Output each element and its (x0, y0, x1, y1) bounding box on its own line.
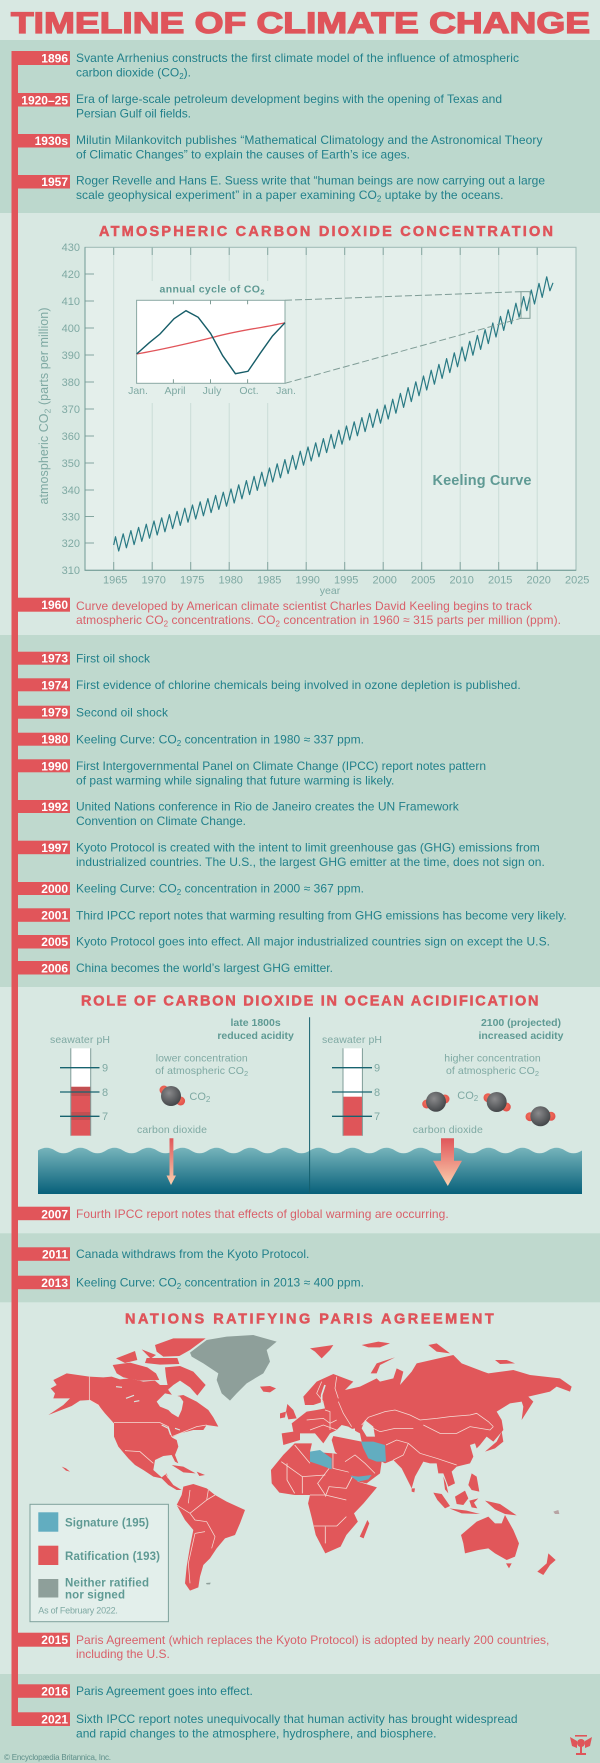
entry 2007: Fourth IPCC report notes that effects of global warming are occurring. (76, 1207, 449, 1221)
y axis labels: 380 (62, 377, 80, 389)
inset: annual cycle of CO2: Jan. (128, 385, 148, 397)
entry 2015: 2015 (41, 1633, 68, 1647)
entry 1979: Second oil shock (76, 705, 169, 719)
inset: annual cycle of CO2: Jan. (276, 385, 296, 397)
entry 1957: 1957 (41, 175, 68, 189)
entry 1997: Kyoto Protocol is created with the intent to limit greenhouse gas (GHG) emissions from (76, 841, 540, 855)
scenario: 2100 projected: 2 (474, 1094, 479, 1103)
inset: annual cycle of CO2: Oct. (239, 385, 259, 397)
entry 1957 (18, 174, 545, 204)
inset: annual cycle of CO2: 2 (260, 288, 264, 297)
entry 1920–25: 1920–25 (21, 94, 68, 108)
panel: nations ratifying Paris Agreement (18, 1312, 572, 1661)
entry 1930s: 1930s (35, 134, 68, 148)
scenario: late 1800s: CO (189, 1091, 206, 1103)
entry 2011: Canada withdraws from the Kyoto Protocol. (76, 1247, 309, 1261)
entry 2013: Keeling Curve: CO (76, 1276, 177, 1290)
inset: annual cycle of CO2: July (203, 385, 222, 397)
entry 2016: Paris Agreement goes into effect. (76, 1684, 253, 1698)
entry 2013 (18, 1276, 364, 1291)
heading: NATIONS RATIFYING PARIS AGREEMENT (125, 1312, 494, 1328)
North America (48, 1335, 277, 1490)
entry 1960: 2 (275, 620, 280, 628)
y axis labels: 370 (62, 404, 80, 416)
pH gauge right: 7 (374, 1111, 380, 1123)
entry 2021 (12, 1712, 518, 1740)
entry 2016: 2016 (41, 1684, 68, 1698)
entry 2000: 2 (177, 888, 182, 897)
scenario: 2100 projected: seawater pH (322, 1034, 382, 1046)
y axis labels: 320 (62, 538, 80, 550)
entry 2001: Third IPCC report notes that warming resulting from GHG emissions has become very likely. (76, 908, 567, 922)
legend item: neither: Neither ratified (65, 1578, 149, 1590)
entry 1960: concentration in 1960 ≈ 315 parts per million (ppm). (280, 613, 561, 627)
entry 1997: industrialized countries. The U.S., the largest GHG emitter at the time, does not sign on. (76, 855, 545, 869)
y axis title: 2 (42, 408, 52, 413)
entry 1920–25 (18, 92, 502, 120)
title: TIMELINE OF CLIMATE CHANGE (11, 7, 590, 40)
entry 1979 (18, 705, 169, 720)
entry 1960: 2 (164, 620, 169, 628)
scenario: 2100 projected: CO (457, 1090, 474, 1102)
scenario: 2100 projected: 2 (535, 1069, 539, 1078)
inset: annual cycle of CO2 (128, 284, 296, 397)
icon: Britannica thistle (570, 1735, 592, 1755)
pH gauge left (60, 1048, 108, 1136)
entry 1979: 1979 (41, 706, 68, 720)
entry 2015: including the U.S. (76, 1647, 170, 1661)
x axis labels (103, 574, 589, 586)
scenario: 2100 projected: of atmospheric CO (446, 1065, 535, 1077)
entry 1990: 1990 (41, 759, 68, 773)
entry 2000 (18, 882, 364, 897)
x axis labels: 1970 (141, 574, 166, 586)
x axis labels: 1985 (257, 574, 281, 586)
scenario: 2100 projected: increased acidity (478, 1030, 564, 1042)
y axis labels: 400 (62, 323, 80, 335)
Greenland (190, 1335, 277, 1401)
entry 1920–25: Persian Gulf oil fields. (76, 106, 191, 120)
y axis title: (parts per million) (37, 308, 51, 409)
y axis labels: 410 (62, 296, 80, 308)
panel: timeline 2016–2021 (0, 1674, 600, 1763)
scenario: late 1800s: late 1800s (230, 1017, 281, 1029)
arrow: small CO2 uptake (166, 1138, 176, 1185)
CO2 molecules (422, 1092, 556, 1126)
legend note: As of February 2022. (38, 1606, 118, 1616)
divider (309, 1017, 311, 1193)
y axis labels: 340 (62, 485, 80, 497)
ocean with waves (38, 1148, 582, 1194)
pH gauge left: 8 (102, 1087, 108, 1099)
scenario: late 1800s: lower concentration (156, 1052, 248, 1064)
entry 1896: 2 (179, 72, 184, 81)
timeline bar (12, 51, 18, 1726)
x axis title: year (320, 585, 341, 597)
y axis labels: 310 (62, 565, 80, 577)
scenario: 2100 projected: carbon dioxide (413, 1124, 483, 1136)
pH gauge right: 8 (374, 1087, 380, 1099)
entry 1992: 1992 (41, 800, 68, 814)
CO2 molecule (160, 1086, 185, 1106)
entry 1980: 2 (177, 739, 182, 748)
entry 1957: scale geophysical experiment” in a paper examining CO (76, 188, 377, 202)
entry 1973: 1973 (41, 652, 68, 666)
entry 1997: 1997 (41, 841, 68, 855)
signature-only countries (361, 1442, 386, 1462)
legend item: neither (38, 1578, 149, 1602)
scenario: late 1800s: 2 (206, 1095, 211, 1104)
entry 1973 (18, 651, 151, 666)
Eurasia (280, 1342, 572, 1493)
y axis labels: 390 (62, 350, 80, 362)
panel: timeline 2011–2013 (0, 1233, 600, 1302)
y axis labels: 330 (62, 512, 80, 524)
entry 2013: 2 (177, 1282, 182, 1291)
x axis labels: 1980 (218, 574, 243, 586)
entry 1896: Svante Arrhenius constructs the first climate model of the influence of atmospheric (76, 51, 519, 65)
entry 2021: and rapid changes to the atmosphere, hydrosphere, and biosphere. (76, 1726, 436, 1740)
entry 2006: China becomes the world’s largest GHG emitter. (76, 961, 333, 975)
pH gauge left: 7 (102, 1111, 108, 1123)
entry 1930s: of Climatic Changes” to explain the causes of Earth’s ice ages. (76, 148, 410, 162)
scenario: late 1800s: of atmospheric CO (155, 1065, 244, 1077)
scenario: late 1800s (50, 1017, 294, 1185)
legend (30, 1504, 168, 1622)
entry 1896 (12, 51, 519, 81)
entry 1980: concentration in 1980 ≈ 337 ppm. (181, 732, 364, 746)
entry 1960: 1960 (41, 598, 68, 612)
entry 1960: Curve developed by American climate scientist Charles David Keeling begins to track (76, 599, 533, 613)
entry 2005: Kyoto Protocol goes into effect. All major industrialized countries sign on except the U.S. (76, 935, 550, 949)
entry 2000: Keeling Curve: CO (76, 882, 177, 896)
legend item: neither: nor signed (65, 1590, 125, 1602)
entry 1957: Roger Revelle and Hans E. Suess write that “human beings are now carrying out a large (76, 174, 545, 188)
arrow: large CO2 uptake (433, 1138, 462, 1186)
x axis labels: 2025 (565, 574, 589, 586)
entry 2011: 2011 (42, 1248, 68, 1262)
x axis labels: 1965 (103, 574, 127, 586)
data line (114, 277, 553, 551)
entry 1930s: Milutin Milankovitch publishes “Mathematical Climatology and the Astronomical Theory (76, 133, 542, 147)
x axis labels: 2010 (449, 574, 474, 586)
y axis labels: 360 (62, 431, 80, 443)
scenario: 2100 projected: 2100 (projected) (481, 1017, 561, 1029)
credit: © Encyclopædia Britannica, Inc. (4, 1753, 111, 1762)
entry 2021: 2021 (41, 1712, 68, 1726)
entry 1930s (18, 133, 542, 162)
panel: early timeline 1896–1957 (0, 40, 600, 213)
scenario: 2100 projected: higher concentration (444, 1052, 541, 1064)
entry 1990: of past warming while signaling that future warming is likely. (76, 773, 394, 787)
entry 1957: uptake by the oceans. (381, 188, 504, 202)
entry 1990 (18, 759, 486, 787)
heading: ROLE OF CARBON DIOXIDE IN OCEAN ACIDIFICATION (81, 994, 538, 1010)
legend item: ratification: Ratification (193) (65, 1551, 160, 1563)
entry 2000: concentration in 2000 ≈ 367 ppm. (181, 882, 364, 896)
y axis title: atmospheric CO (37, 413, 51, 504)
entry 1974: First evidence of chlorine chemicals being involved in ozone depletion is published. (76, 678, 521, 692)
entry 1990: First Intergovernmental Panel on Climate Change (IPCC) report notes pattern (76, 759, 486, 773)
entry 1896: ). (184, 66, 191, 80)
curve label: Keeling Curve (432, 473, 532, 489)
y axis labels (62, 242, 80, 577)
x axis labels: 2000 (372, 574, 397, 586)
y axis labels: 350 (62, 458, 80, 470)
pH gauge right: 9 (374, 1062, 380, 1074)
x axis labels: 2005 (411, 574, 435, 586)
entry 2013: concentration in 2013 ≈ 400 ppm. (181, 1276, 364, 1290)
line chart: Keeling Curve (37, 242, 589, 597)
scenario: 2100 projected (322, 1017, 564, 1186)
panel: timeline 1973–2006 (0, 635, 600, 987)
heading: ATMOSPHERIC CARBON DIOXIDE CONCENTRATION (99, 224, 553, 240)
entry 1957: 2 (377, 194, 382, 204)
x axis labels: 1975 (180, 574, 204, 586)
pH gauge right (332, 1048, 380, 1136)
entry 2013: 2013 (41, 1276, 68, 1290)
entry 2005: 2005 (41, 935, 68, 949)
inset: annual cycle of CO2: April (164, 385, 186, 397)
zoom callout lines (285, 292, 530, 383)
entry 1992: United Nations conference in Rio de Janeiro creates the UN Framework (76, 800, 460, 814)
entry 1980: Keeling Curve: CO (76, 732, 177, 746)
scenario: late 1800s: reduced acidity (217, 1030, 294, 1042)
scenario: late 1800s: seawater pH (50, 1034, 110, 1046)
entry 2000: 2000 (41, 882, 68, 896)
x axis labels: 1990 (295, 574, 320, 586)
entry 2021: Sixth IPCC report notes unequivocally that human activity has brought widespread (76, 1712, 518, 1726)
entry 1980 (18, 732, 364, 748)
y axis labels: 420 (62, 269, 80, 281)
x axis labels: 2015 (488, 574, 512, 586)
South America (177, 1484, 245, 1591)
entry 2015 (18, 1633, 549, 1661)
Iceland (260, 1386, 276, 1392)
entry 1960 (18, 598, 561, 628)
scenario: late 1800s: carbon dioxide (137, 1124, 207, 1136)
entry 1980: 1980 (41, 733, 68, 747)
entry 1960: atmospheric CO (76, 613, 164, 627)
inset: annual cycle of CO2: annual cycle of CO (160, 284, 260, 296)
world map (48, 1335, 572, 1591)
entry 1992: Convention on Climate Change. (76, 814, 246, 828)
Africa (271, 1443, 377, 1553)
entry 1973: First oil shock (76, 651, 151, 665)
entry 1920–25: Era of large-scale petroleum development begins with the opening of Texas and (76, 92, 502, 106)
panel: atmospheric carbon dioxide concentration (18, 224, 589, 628)
entry 2001: 2001 (41, 909, 68, 923)
entry 2007: 2007 (41, 1207, 68, 1221)
x axis labels: 2020 (526, 574, 551, 586)
pH gauge left: 9 (102, 1062, 108, 1074)
entry 1960: concentrations. CO (168, 613, 275, 627)
entry 2006: 2006 (41, 962, 68, 976)
scenario: late 1800s: 2 (244, 1069, 248, 1078)
y axis labels: 430 (62, 242, 80, 254)
x axis labels: 1995 (334, 574, 358, 586)
Oceania (433, 1491, 559, 1575)
entry 1896: 1896 (41, 52, 68, 66)
entry 1992 (18, 800, 460, 828)
entry 2015: Paris Agreement (which replaces the Kyoto Protocol) is adopted by nearly 200 countries, (76, 1633, 549, 1647)
entry 1974: 1974 (41, 678, 68, 692)
entry 1997 (18, 841, 545, 869)
entry 1896: carbon dioxide (CO (76, 66, 179, 80)
panel: role of carbon dioxide in ocean acidification (18, 994, 582, 1221)
legend item: signature: Signature (195) (65, 1518, 149, 1530)
